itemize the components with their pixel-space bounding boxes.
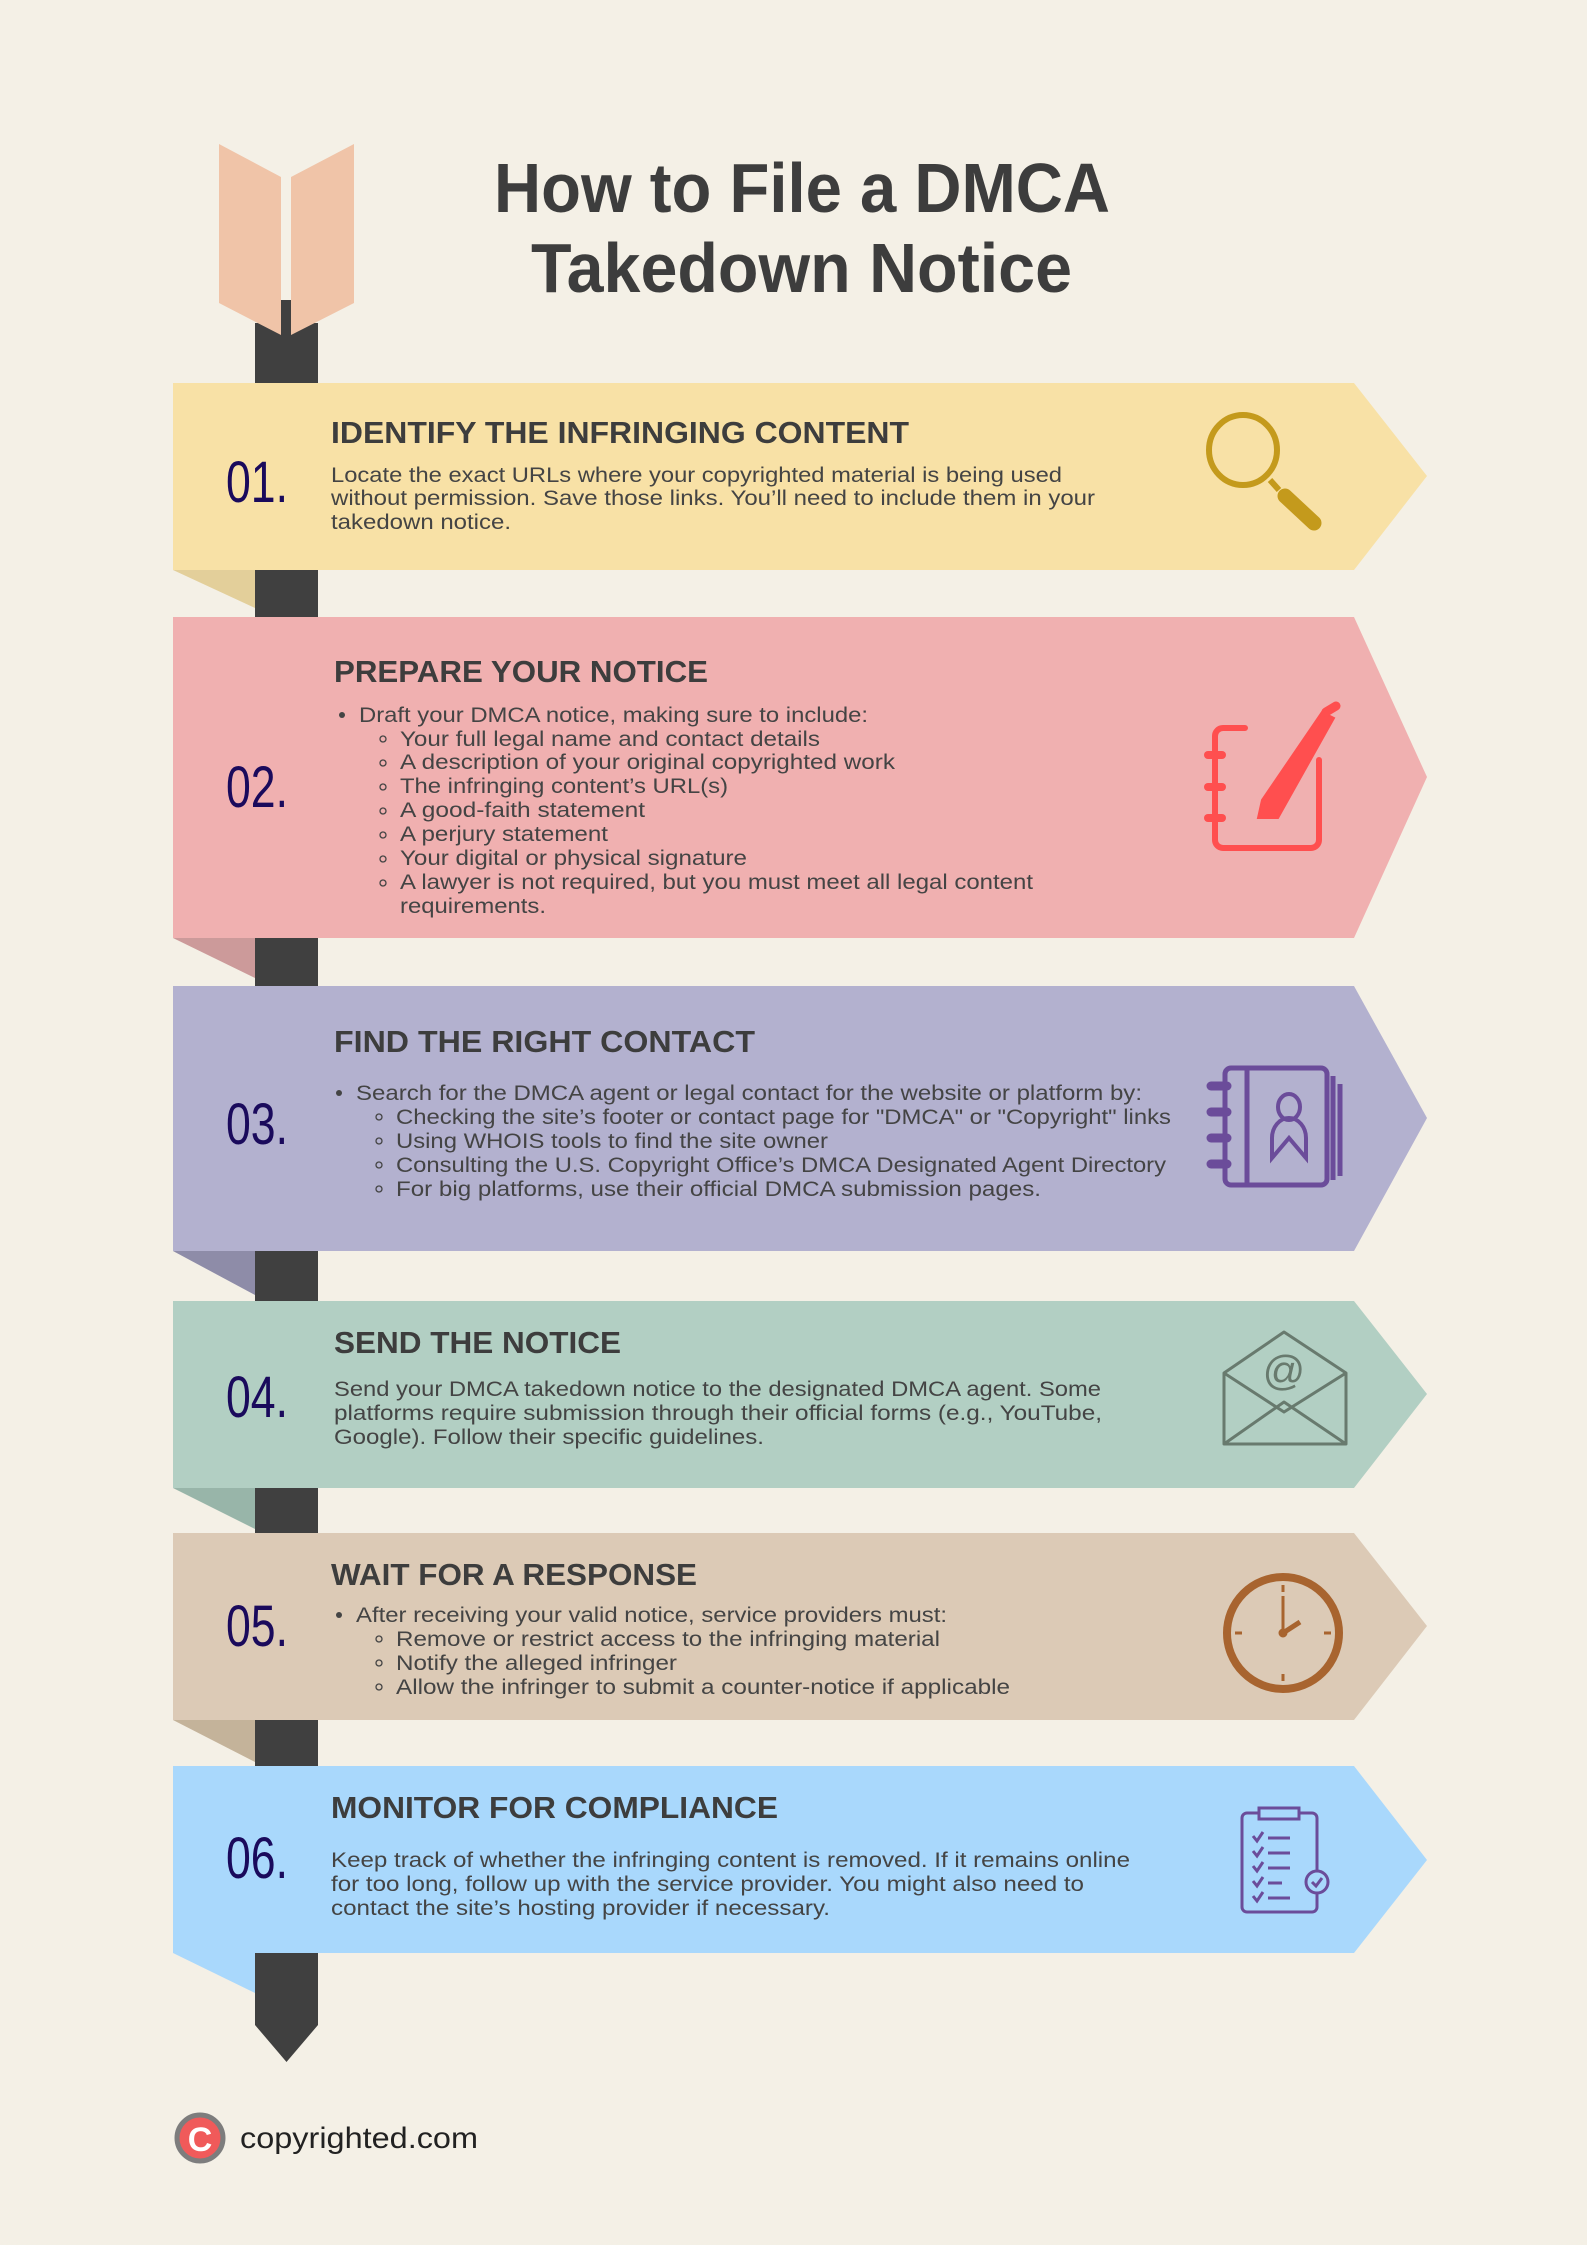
panel: step 5: Allow the infringer to submit a counter-notice if applicable (396, 1676, 1010, 1699)
panel: step 1: IDENTIFY THE INFRINGING CONTENT (331, 415, 909, 450)
panel: step 5: After receiving your valid notice, service providers must: (356, 1604, 947, 1627)
panel: step 1 (173, 383, 1427, 570)
panel: step 5 (173, 1533, 1427, 1720)
panel: step 3: Checking the site’s footer or contact page for "DMCA" or "Copyright" links (396, 1106, 1171, 1129)
panel: step 4: SEND THE NOTICE (334, 1325, 621, 1360)
arrow feathers (219, 144, 354, 335)
panel: step 2: Draft your DMCA notice, making sure to include: (359, 704, 868, 727)
title (494, 149, 1110, 307)
panel: step 4: platforms require submission through their official forms (e.g., YouTube, (334, 1402, 1102, 1425)
title: Takedown Notice (531, 229, 1072, 307)
panel: step 1: without permission. Save those links. You’ll need to include them in your (330, 487, 1095, 510)
panel: step 2: 02. (226, 755, 288, 820)
panel: step 5: Notify the alleged infringer (396, 1652, 677, 1675)
panel: step 2: Your digital or physical signature (400, 847, 747, 870)
icon: magnifier (1209, 415, 1314, 523)
panel: step 6: contact the site’s hosting provider if necessary. (331, 1897, 830, 1920)
panel: step 4: Google). Follow their specific guidelines. (334, 1426, 764, 1449)
panel: step 5: WAIT FOR A RESPONSE (331, 1557, 697, 1592)
panel: step 6: MONITOR FOR COMPLIANCE (331, 1790, 778, 1825)
panel: step 2: A description of your original copyrighted work (400, 751, 896, 774)
footer logo: C (188, 2121, 212, 2159)
icon: clock (1227, 1577, 1339, 1689)
panel: step 4 (173, 1301, 1427, 1488)
footer logo: copyrighted.com (240, 2122, 478, 2155)
panel: step 2: requirements. (400, 895, 546, 918)
panel: step 2: The infringing content’s URL(s) (400, 775, 728, 798)
icon: envelope (1224, 1332, 1346, 1444)
panel: step 3: Search for the DMCA agent or legal contact for the website or platform by: (356, 1082, 1142, 1105)
icon: notebook with pencil (1208, 706, 1336, 848)
panel: step 2: A lawyer is not required, but you must meet all legal content (400, 871, 1033, 894)
title: How to File a DMCA (494, 149, 1110, 227)
panel: step 5: 05. (226, 1594, 288, 1659)
panel: step 3: Consulting the U.S. Copyright Office’s DMCA Designated Agent Directory (396, 1154, 1167, 1177)
panel: step 2 (173, 617, 1427, 938)
panel: step 6: 06. (226, 1826, 288, 1891)
fold shadows (173, 570, 255, 1993)
panel: step 2: PREPARE YOUR NOTICE (334, 654, 708, 689)
panel: step 2: A perjury statement (400, 823, 608, 846)
panel: step 3: For big platforms, use their official DMCA submission pages. (396, 1178, 1041, 1201)
panel: step 6: Keep track of whether the infringing content is removed. If it remains online (331, 1849, 1130, 1872)
panel: step 3: 03. (226, 1092, 288, 1157)
panel: step 4: 04. (226, 1365, 288, 1430)
panel: step 1: 01. (226, 450, 288, 515)
icon: checklist clipboard (1242, 1808, 1328, 1912)
panel: step 5: Remove or restrict access to the infringing material (396, 1628, 940, 1651)
icon: envelope: @ (1263, 1347, 1305, 1394)
panel: step 2: Your full legal name and contact details (400, 728, 820, 751)
panel: step 6 (173, 1766, 1427, 1953)
panel: step 3 (173, 986, 1427, 1251)
panel: step 6: for too long, follow up with the service provider. You might also need to (331, 1873, 1084, 1896)
panel: step 1: takedown notice. (331, 511, 511, 534)
icon: address book (1211, 1068, 1340, 1185)
panel: step 3: Using WHOIS tools to find the site owner (396, 1130, 828, 1153)
arrow pole (255, 300, 318, 2062)
panel: step 1: Locate the exact URLs where your copyrighted material is being used (331, 464, 1062, 487)
panel: step 2: A good-faith statement (400, 799, 645, 822)
panel: step 4: Send your DMCA takedown notice to the designated DMCA agent. Some (334, 1378, 1101, 1401)
panel: step 3: FIND THE RIGHT CONTACT (334, 1024, 755, 1059)
footer logo (177, 2115, 478, 2161)
